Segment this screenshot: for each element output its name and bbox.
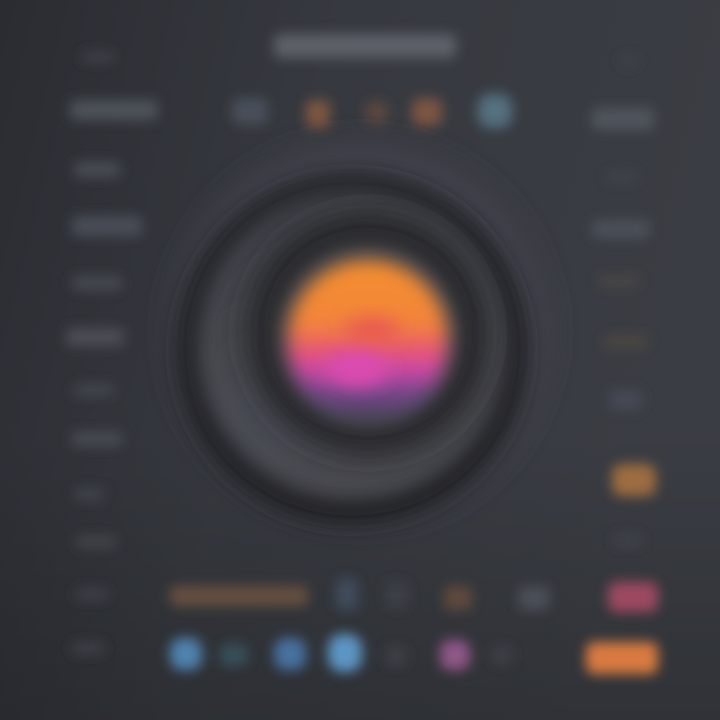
right column coloured badges xyxy=(586,464,658,674)
concentric ring dial xyxy=(170,142,550,526)
top icon row xyxy=(232,94,512,128)
dark inner ring xyxy=(246,211,490,455)
light ring body xyxy=(197,190,507,500)
right column labels xyxy=(592,56,654,546)
title xyxy=(274,34,456,58)
inner grey disc xyxy=(276,243,460,427)
dark outer ring xyxy=(176,174,528,526)
lower chart labels xyxy=(170,578,550,610)
pink highlight xyxy=(328,350,388,386)
bottom icon row xyxy=(170,634,512,672)
gradient ball xyxy=(288,260,448,420)
outer soft halo xyxy=(170,142,550,522)
left column labels xyxy=(66,52,158,654)
red centre xyxy=(344,318,400,342)
